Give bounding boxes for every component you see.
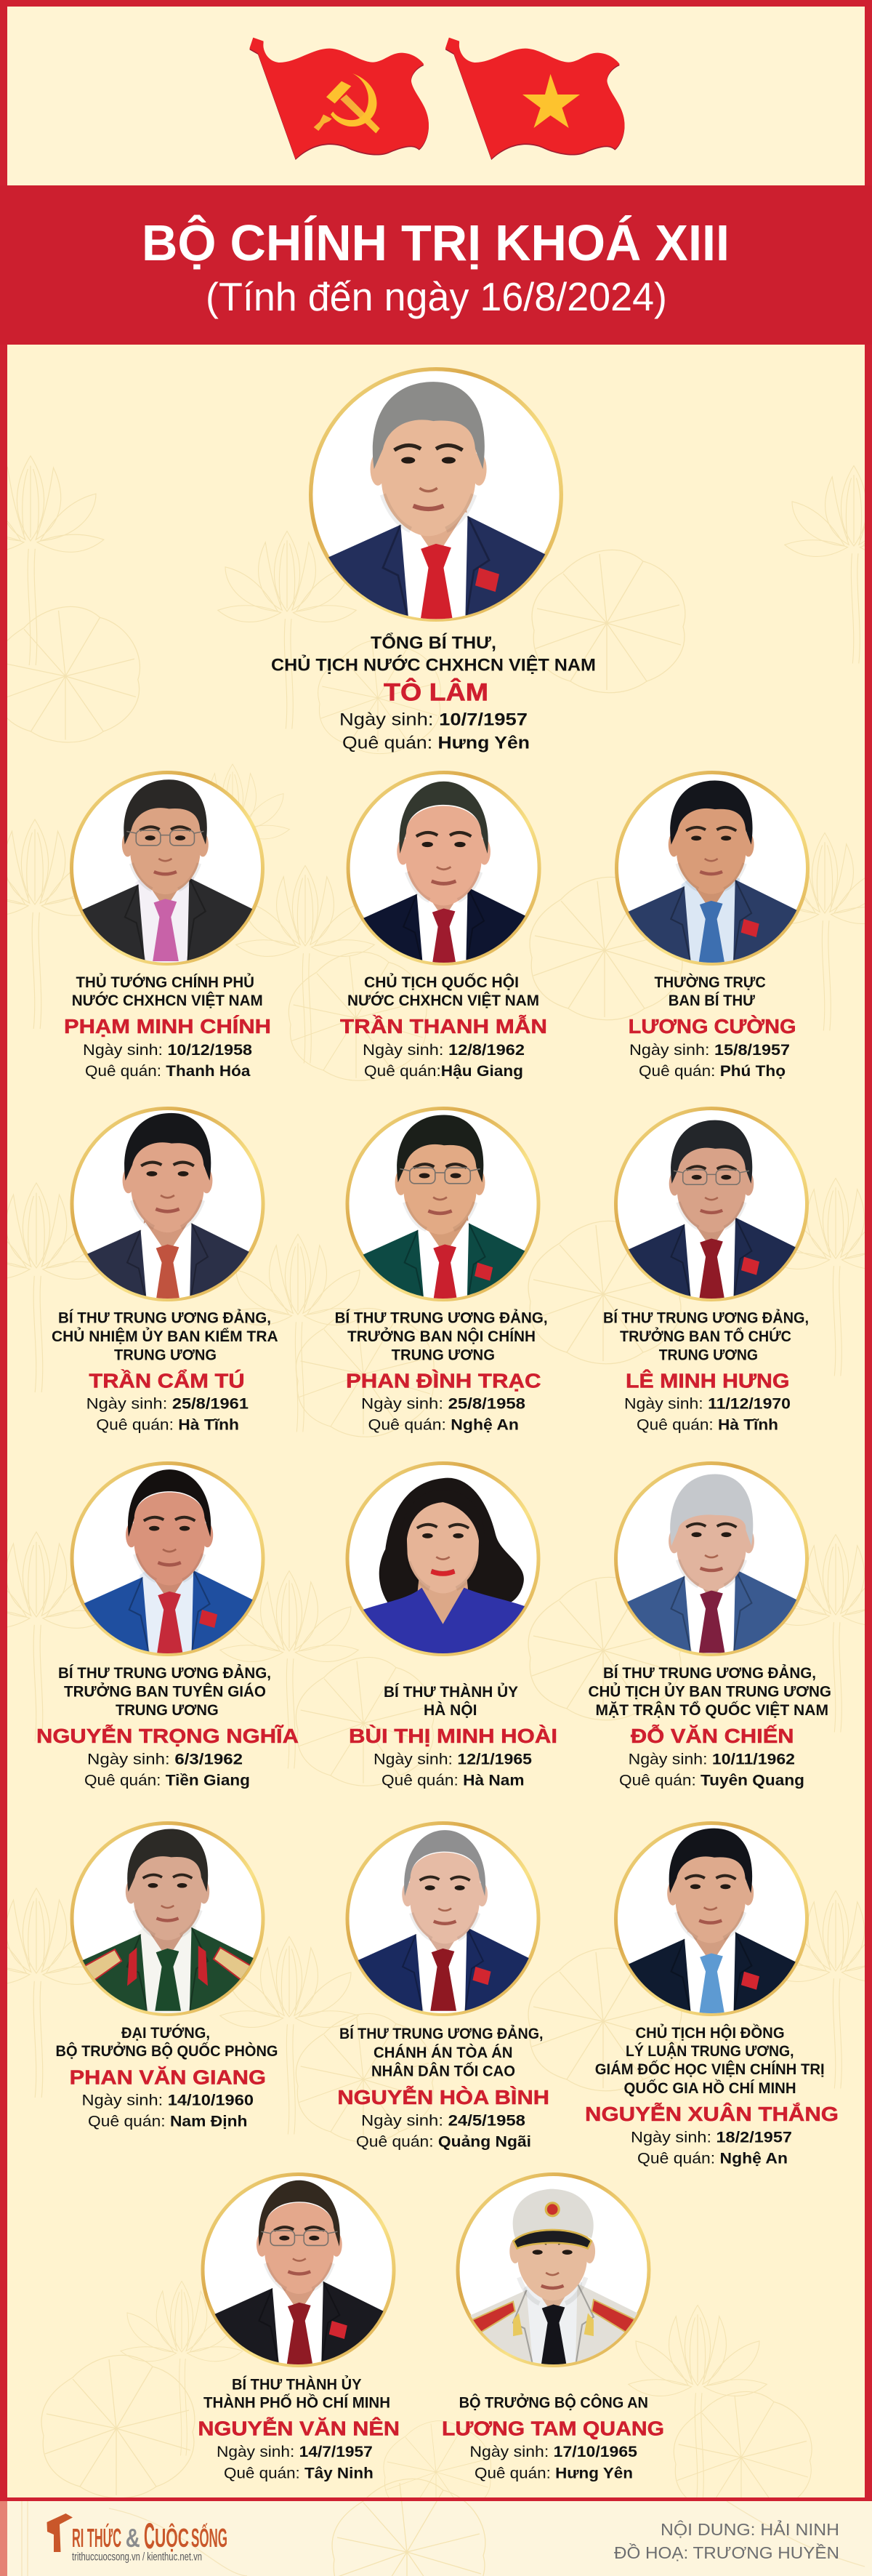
profile: Nguyễn Văn Nên [195, 2174, 403, 2481]
role [603, 1309, 809, 1364]
profile: Lê Minh Hưng [603, 1108, 815, 1434]
credits [614, 2519, 839, 2562]
hometown: Quê quán: Hà Tĩnh [637, 1417, 778, 1434]
role: LÝ LUẬN TRUNG ƯƠNG, [626, 2042, 794, 2060]
portrait [607, 1823, 815, 2021]
role: TRƯỞNG BAN TUYÊN GIÁO [64, 1682, 266, 1700]
role: TRUNG ƯƠNG [116, 1701, 219, 1719]
logo wordmark: RI THỨC [72, 2522, 121, 2553]
profile: Nguyễn Hòa Bình [337, 1823, 549, 2150]
role [654, 973, 766, 1009]
birth date: Ngày sinh: 10/7/1957 [339, 710, 528, 730]
portrait [450, 2174, 657, 2372]
hometown: Quê quán: Nghệ An [637, 2151, 788, 2167]
hometown: Quê quán: Hậu Giang [364, 1063, 523, 1080]
birth date: Ngày sinh: 6/3/1962 [87, 1752, 243, 1768]
name: TRẦN THANH MẪN [340, 1015, 547, 1038]
role: TỔNG BÍ THƯ, [371, 633, 496, 653]
portrait [347, 1463, 539, 1664]
hometown: Quê quán: Quảng Ngãi [356, 2133, 531, 2150]
role: THƯỜNG TRỰC [654, 973, 766, 991]
title: BỘ CHÍNH TRỊ KHOÁ XIII [142, 214, 730, 271]
role: BÍ THƯ TRUNG ƯƠNG ĐẢNG, [603, 1664, 816, 1682]
profile: Trần Cẩm Tú [52, 1108, 278, 1434]
birth date: Ngày sinh: 11/12/1970 [624, 1396, 791, 1413]
role [58, 1664, 271, 1719]
birth date: Ngày sinh: 25/8/1961 [86, 1396, 249, 1413]
hometown: Quê quán: Hà Nam [382, 1773, 525, 1789]
role: BÍ THƯ TRUNG ƯƠNG ĐẢNG, [603, 1309, 809, 1326]
name: TRẦN CẨM TÚ [89, 1369, 245, 1392]
role: MẶT TRẬN TỔ QUỐC VIỆT NAM [596, 1700, 828, 1719]
name: PHẠM MINH CHÍNH [64, 1015, 271, 1038]
role: THÀNH PHỐ HỒ CHÍ MINH [203, 2393, 390, 2412]
role: BÍ THƯ TRUNG ƯƠNG ĐẢNG, [58, 1664, 271, 1682]
role: NƯỚC CHXHCN VIỆT NAM [347, 991, 539, 1009]
birth date: Ngày sinh: 18/2/1957 [631, 2130, 792, 2146]
profile: Phạm Minh Chính [62, 772, 271, 1080]
portrait [70, 1107, 265, 1301]
role: BÍ THƯ TRUNG ƯƠNG ĐẢNG, [339, 2024, 544, 2042]
role: TRƯỞNG BAN NỘI CHÍNH [347, 1327, 536, 1345]
profile: Trần Thanh Mẫn [340, 772, 547, 1080]
role: CHÁNH ÁN TÒA ÁN [374, 2043, 513, 2061]
credits: ĐỒ HOẠ: TRƯƠNG HUYỀN [614, 2543, 839, 2562]
role [335, 1309, 548, 1364]
portrait [607, 1108, 815, 1307]
role: TRƯỞNG BAN TỔ CHỨC [620, 1327, 791, 1345]
portrait [62, 772, 269, 967]
role: CHỦ TỊCH HỘI ĐỒNG [635, 2023, 785, 2042]
name: LÊ MINH HƯNG [626, 1369, 789, 1392]
portrait [339, 1823, 546, 2017]
portrait [195, 2174, 403, 2371]
role: BÍ THƯ THÀNH ỦY [384, 1682, 518, 1701]
role [347, 972, 539, 1009]
birth date: Ngày sinh: 25/8/1958 [361, 1396, 525, 1413]
birth date: Ngày sinh: 17/10/1965 [469, 2444, 637, 2460]
birth date: Ngày sinh: 12/1/1965 [374, 1752, 532, 1768]
role: TRUNG ƯƠNG [114, 1347, 217, 1364]
icon: star [522, 74, 580, 128]
hometown: Quê quán: Thanh Hóa [85, 1063, 251, 1080]
credits: NỘI DUNG: HẢI NINH [661, 2519, 839, 2539]
role: GIÁM ĐỐC HỌC VIỆN CHÍNH TRỊ [595, 2059, 825, 2078]
logo wordmark: UỘC [155, 2522, 189, 2553]
logo wordmark: C [144, 2516, 155, 2556]
name: TÔ LÂM [384, 678, 488, 707]
hometown: Quê quán: Tuyên Quang [619, 1773, 804, 1789]
role [52, 1309, 278, 1364]
birth date: Ngày sinh: 15/8/1957 [629, 1042, 790, 1059]
profile: Tô Lâm [271, 369, 596, 753]
role [595, 2023, 825, 2097]
profile: Nguyễn Xuân Thắng [585, 1823, 839, 2167]
name: PHAN VĂN GIANG [70, 2066, 266, 2089]
text: SỐNG [191, 2522, 227, 2553]
hometown: Quê quán: Tiền Giang [84, 1773, 250, 1789]
role: BỘ TRƯỞNG BỘ CÔNG AN [459, 2394, 648, 2412]
footer background [0, 2500, 872, 2576]
title band [0, 185, 872, 345]
name: NGUYỄN TRỌNG NGHĨA [36, 1725, 299, 1747]
hometown: Quê quán: Hà Tĩnh [96, 1417, 239, 1434]
hometown: Quê quán: Nghệ An [368, 1417, 519, 1434]
profile: Lương Cường [607, 772, 815, 1080]
role: CHỦ NHIỆM ỦY BAN KIỂM TRA [52, 1327, 278, 1345]
portrait [607, 1463, 815, 1658]
role: TRUNG ƯƠNG [392, 1347, 495, 1364]
portrait [64, 1823, 271, 2017]
role [55, 2023, 278, 2060]
icon: national flag [445, 38, 624, 160]
portrait [346, 771, 541, 966]
role: NƯỚC CHXHCN VIỆT NAM [72, 991, 263, 1009]
portrait [66, 1463, 273, 1660]
name: NGUYỄN XUÂN THẮNG [585, 2103, 839, 2125]
icon: logo initial T [47, 2513, 73, 2552]
role: BÍ THƯ TRUNG ƯƠNG ĐẢNG, [335, 1309, 548, 1326]
role: NHÂN DÂN TỐI CAO [371, 2061, 515, 2080]
role: TRUNG ƯƠNG [659, 1347, 758, 1364]
role [203, 2375, 390, 2412]
profile: Lương Tam Quang [442, 2174, 664, 2481]
profile: Phan Đình Trạc [335, 1108, 549, 1434]
hometown: Quê quán: Nam Định [88, 2114, 247, 2130]
profile: Đỗ Văn Chiến [589, 1463, 831, 1789]
role [339, 2024, 544, 2080]
profile: Nguyễn Trọng Nghĩa [36, 1463, 299, 1789]
birth date: Ngày sinh: 10/11/1962 [629, 1752, 795, 1768]
birth date: Ngày sinh: 24/5/1958 [361, 2112, 525, 2129]
role: HÀ NỘI [424, 1701, 477, 1719]
name: ĐỖ VĂN CHIẾN [631, 1725, 794, 1747]
birth date: Ngày sinh: 10/12/1958 [83, 1042, 252, 1059]
birth date: Ngày sinh: 12/8/1962 [363, 1042, 525, 1059]
header: flags area [7, 7, 865, 185]
role: CHỦ TỊCH NƯỚC CHXHCN VIỆT NAM [271, 654, 596, 675]
birth date: Ngày sinh: 14/7/1957 [217, 2444, 373, 2460]
logo url: trithuccuocsong.vn / kienthuc.net.vn [72, 2551, 202, 2564]
role: ĐẠI TƯỚNG, [121, 2023, 210, 2042]
hometown: Quê quán: Phú Thọ [639, 1063, 786, 1080]
hometown: Quê quán: Hưng Yên [342, 734, 530, 753]
icon: communist party flag [249, 38, 429, 160]
role [72, 973, 263, 1009]
portrait [607, 772, 815, 969]
name: NGUYỄN HÒA BÌNH [337, 2086, 549, 2108]
role: BỘ TRƯỞNG BỘ QUỐC PHÒNG [55, 2041, 278, 2060]
profile: Bùi Thị Minh Hoài [347, 1463, 557, 1789]
birth date: Ngày sinh: 14/10/1960 [81, 2093, 254, 2109]
name: BÙI THỊ MINH HOÀI [349, 1725, 557, 1747]
portrait [309, 367, 563, 622]
logo wordmark [72, 2516, 227, 2556]
name: NGUYỄN VĂN NÊN [198, 2417, 400, 2439]
subtitle: (Tính đến ngày 16/8/2024) [206, 274, 667, 319]
name: PHAN ĐÌNH TRẠC [346, 1369, 541, 1392]
portrait [346, 1107, 541, 1301]
footer logo [47, 2513, 227, 2564]
role [589, 1664, 831, 1719]
name: LƯƠNG TAM QUANG [442, 2417, 664, 2439]
role [384, 1682, 518, 1719]
hometown: Quê quán: Hưng Yên [475, 2465, 633, 2481]
role: CHỦ TỊCH ỦY BAN TRUNG ƯƠNG [589, 1682, 831, 1700]
logo wordmark: & [126, 2523, 140, 2553]
name: LƯƠNG CƯỜNG [629, 1015, 796, 1038]
profile: Phan Văn Giang [55, 1823, 278, 2130]
role [271, 633, 596, 675]
hometown: Quê quán: Tây Ninh [224, 2465, 374, 2481]
role: BÍ THƯ THÀNH ỦY [232, 2375, 362, 2394]
role: BAN BÍ THƯ [669, 991, 755, 1009]
role: QUỐC GIA HỒ CHÍ MINH [623, 2078, 796, 2097]
role: THỦ TƯỚNG CHÍNH PHỦ [76, 973, 254, 991]
role: BÍ THƯ TRUNG ƯƠNG ĐẢNG, [58, 1309, 271, 1326]
role: CHỦ TỊCH QUỐC HỘI [364, 972, 519, 991]
